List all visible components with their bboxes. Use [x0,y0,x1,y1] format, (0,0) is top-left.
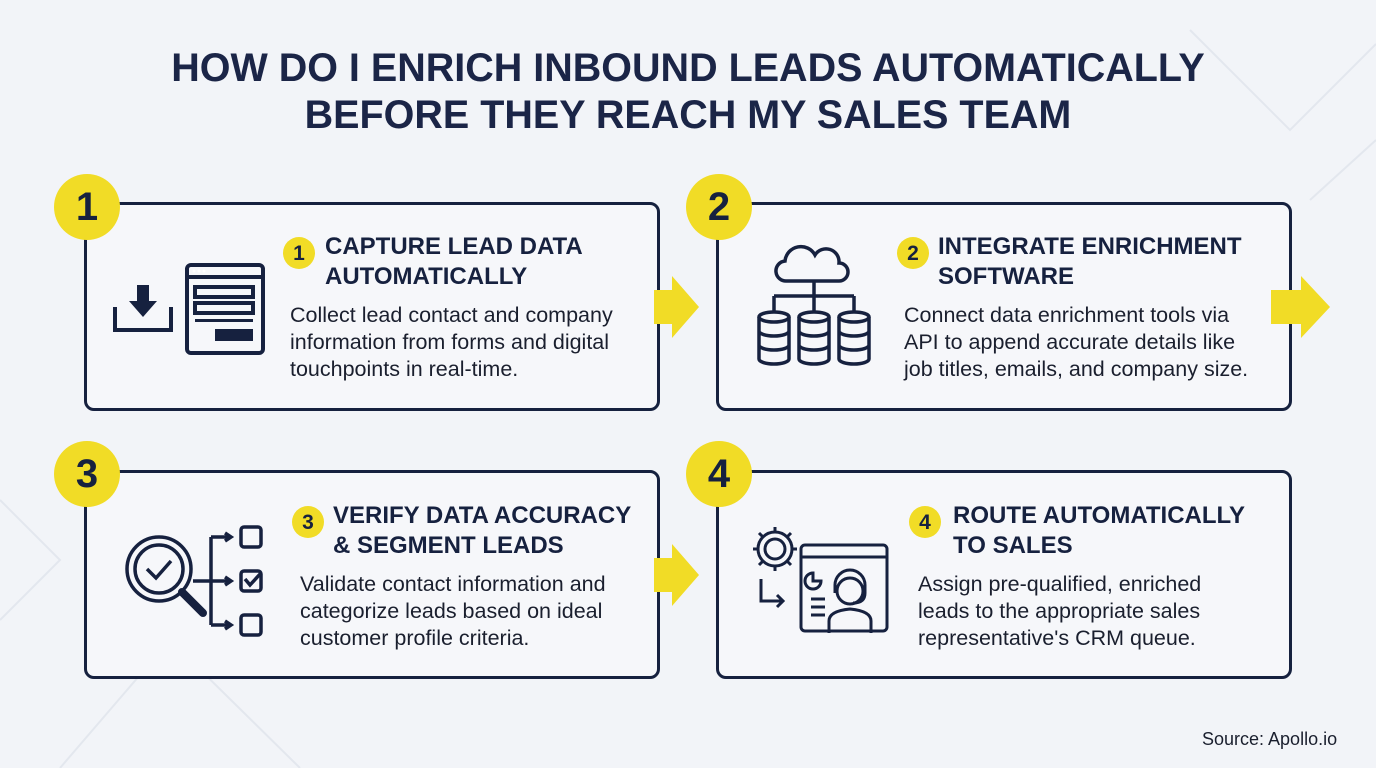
badge 4: 4 [708,452,730,496]
icon: magnifier checklist [125,525,263,637]
body 1: Collect lead contact and company [290,303,613,327]
arrow 2 [1271,276,1330,338]
heading 2: 2 [907,242,919,265]
heading 2: INTEGRATE ENRICHMENT [938,233,1242,260]
heading 3: 3 [302,511,314,534]
body 2: Connect data enrichment tools via [904,303,1229,327]
heading 3 [292,502,631,559]
arrow 3 [654,544,699,606]
body 1 [290,303,613,381]
heading 4 [909,502,1245,559]
panel: step 2 [716,202,1292,411]
body 4: representative's CRM queue. [918,626,1196,650]
badge 3 [54,441,120,507]
heading 1: 1 [293,242,305,265]
panel: step 3 [84,470,660,679]
heading 2 [897,233,1242,290]
heading 1 [283,233,583,290]
heading 3: & SEGMENT LEADS [333,532,564,559]
badge 2 [686,174,752,240]
body 1: information from forms and digital [290,330,609,354]
panel: step 1 [84,202,660,411]
body 2 [903,303,1248,381]
body 3: categorize leads based on ideal [300,599,602,623]
body 4: Assign pre-qualified, enriched [918,572,1201,596]
heading 4: ROUTE AUTOMATICALLY [953,502,1245,529]
panel: step 4 [716,470,1292,679]
body 4: leads to the appropriate sales [918,599,1200,623]
body 3: customer profile criteria. [300,626,529,650]
title: BEFORE THEY REACH MY SALES TEAM [305,93,1071,137]
badge 1 [54,174,120,240]
body 4 [918,572,1201,650]
body 3: Validate contact information and [300,572,606,596]
heading 1: CAPTURE LEAD DATA [325,233,583,260]
body 2: job titles, emails, and company size. [904,357,1248,381]
source: Source: Apollo.io [1202,729,1337,749]
badge 3: 3 [76,452,98,496]
icon: gear and agent [753,527,888,633]
icon: download form [113,263,265,355]
heading 2: SOFTWARE [938,263,1074,290]
arrow 1 [654,276,699,338]
heading 4: 4 [919,511,931,534]
icon: cloud databases [757,244,871,366]
heading 4: TO SALES [953,532,1073,559]
body 1: touchpoints in real-time. [290,357,518,381]
badge 4 [686,441,752,507]
title: HOW DO I ENRICH INBOUND LEADS AUTOMATICALLY [171,46,1205,90]
heading 3: VERIFY DATA ACCURACY [333,502,631,529]
badge 1: 1 [76,185,98,229]
body 2: API to append accurate details like [904,330,1235,354]
badge 2: 2 [708,185,730,229]
body 3 [300,572,606,650]
heading 1: AUTOMATICALLY [325,263,527,290]
title [171,46,1205,137]
